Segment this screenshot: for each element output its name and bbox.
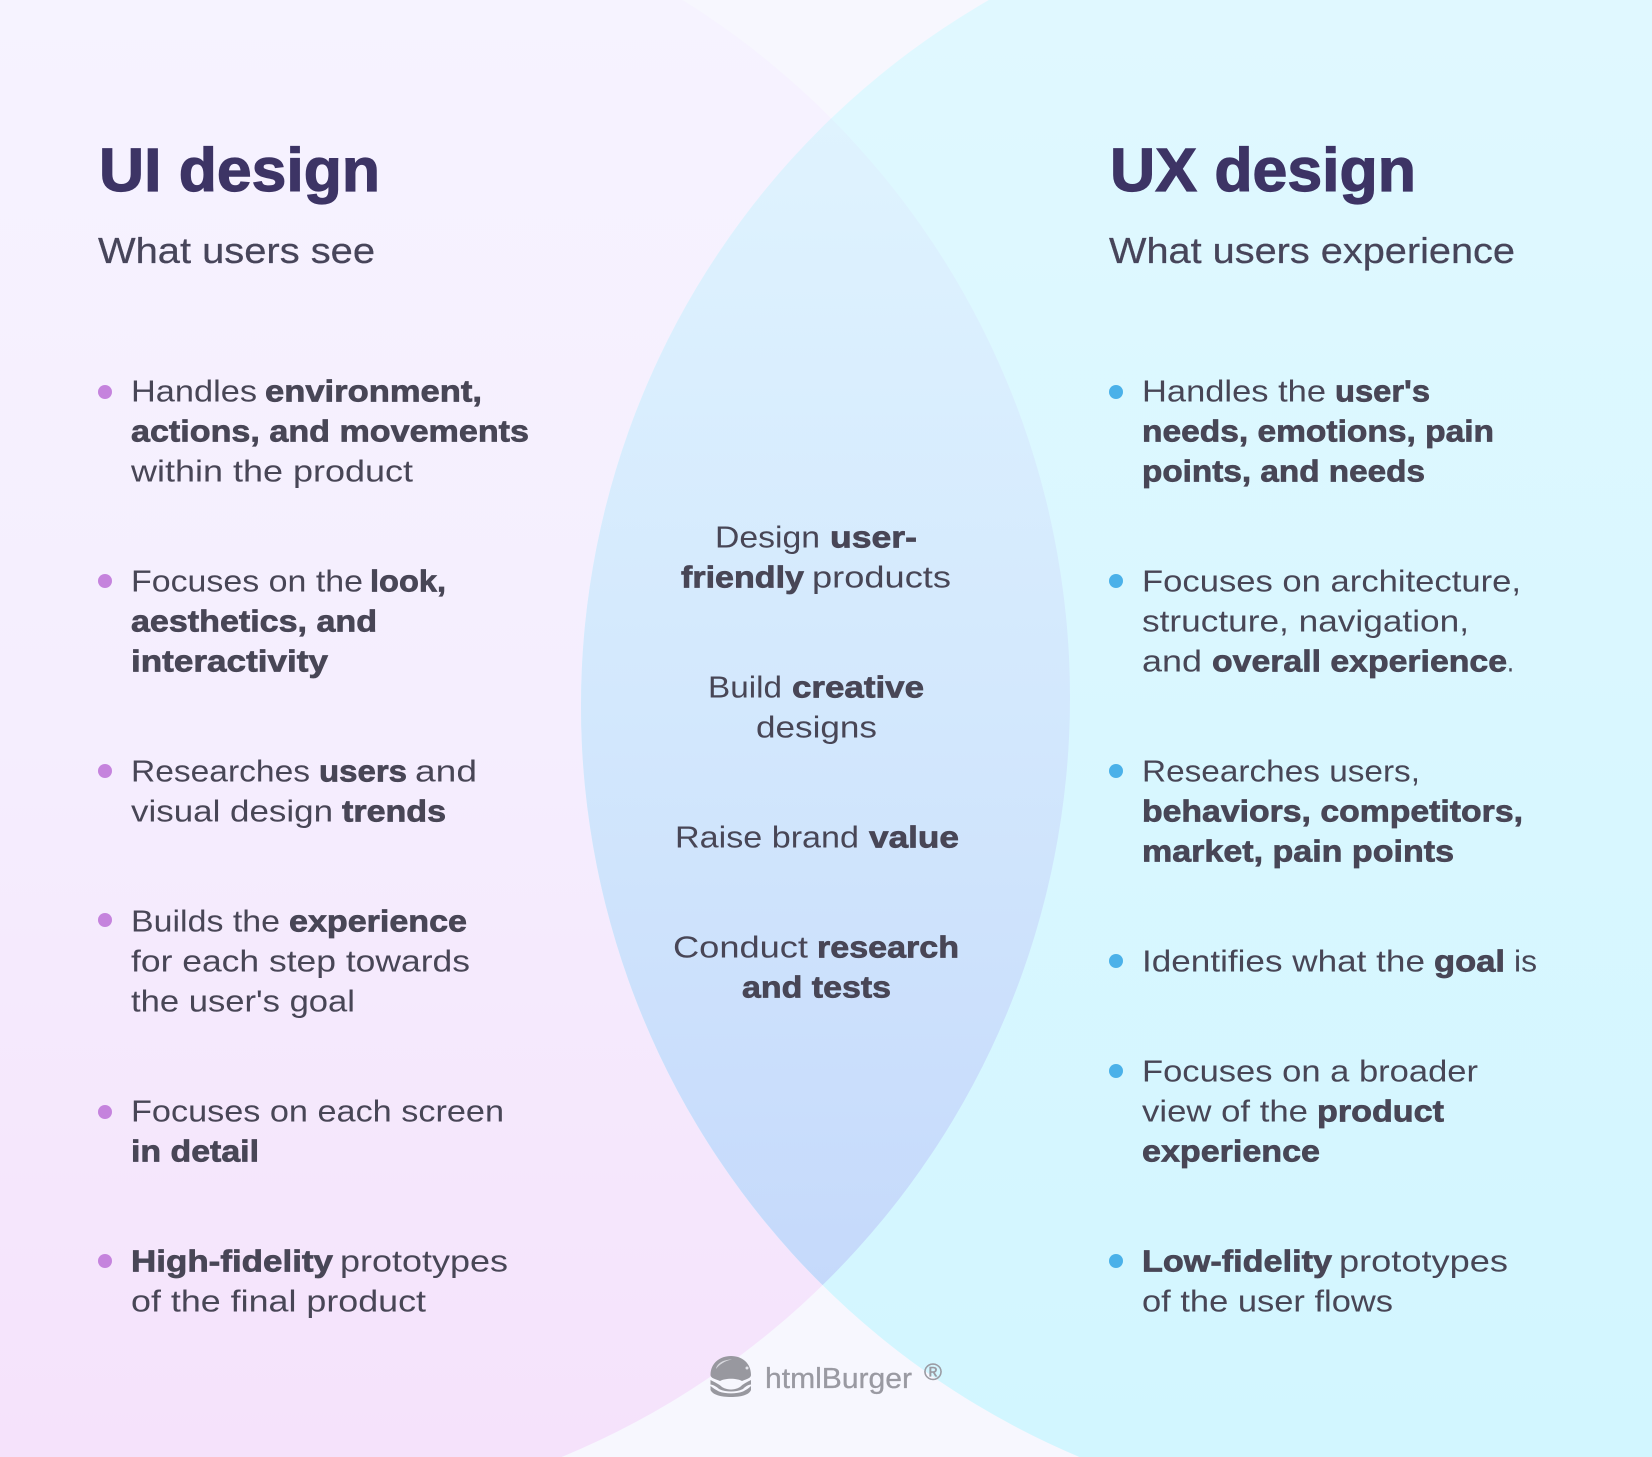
list item: goal: is: [1514, 944, 1537, 978]
icon: burger: [710, 1356, 751, 1397]
list item: architecture: .: [1507, 644, 1514, 678]
list item: product experience: product: [1317, 1094, 1444, 1128]
list item: user needs: [1109, 374, 1494, 488]
list item: environment: within the product: [130, 454, 414, 488]
heading: UI design: UI design: [99, 136, 380, 204]
circle: UX design: [581, 0, 1652, 1457]
list item: product experience: view of the: [1142, 1094, 1308, 1128]
list item: research behaviors: [1109, 754, 1523, 868]
list item: detail: [98, 1094, 504, 1168]
shared item: user-friendly: friendly: [681, 560, 804, 594]
list item: research trends: [98, 754, 477, 828]
list item: user needs: needs, emotions, pain: [1142, 414, 1494, 448]
list item: experience: experience: [289, 904, 467, 938]
list item: look: aesthetics, and: [131, 604, 377, 638]
list item: look: look,: [370, 564, 446, 598]
list item: product experience: [1109, 1054, 1478, 1168]
list item: user needs: user's: [1335, 374, 1430, 408]
list item: research trends: and: [415, 754, 477, 788]
list item: experience: the user's goal: [131, 984, 355, 1018]
list item: detail: Focuses on each screen: [131, 1094, 504, 1128]
list item: look: Focuses on the: [131, 564, 363, 598]
list item: research trends: visual design: [131, 794, 333, 828]
shared item: research and tests: and tests: [742, 970, 891, 1004]
list item: research trends: Researches: [131, 754, 310, 788]
subheading: What users see: What users see: [98, 230, 375, 271]
list item: architecture: overall experience: [1212, 644, 1507, 678]
list item: product experience: experience: [1142, 1134, 1320, 1168]
shared item: user-friendly: [681, 520, 951, 594]
lens: overlap of both circles: [581, 302, 1070, 1285]
list item: high-fidelity: High-fidelity: [131, 1244, 333, 1278]
list item: look: interactivity: [131, 644, 328, 678]
shared item: creative designs: [708, 670, 924, 744]
list item: high-fidelity: of the final product: [131, 1284, 427, 1318]
shared item: creative designs: Build: [708, 670, 782, 704]
shared item: brand value: value: [869, 820, 959, 854]
list item: research trends: users: [319, 754, 407, 788]
list item: architecture: structure, navigation,: [1142, 604, 1469, 638]
list item: architecture: Focuses on architecture,: [1142, 564, 1521, 598]
registered mark: ®: [924, 1359, 942, 1385]
logo: htmlBurger: [710, 1356, 942, 1397]
shared item: user-friendly: Design: [715, 520, 820, 554]
list item: experience: for each step towards: [131, 944, 470, 978]
circle: UI design: [0, 0, 1070, 1457]
shared item: research and tests: [673, 930, 959, 1004]
list item: high-fidelity: prototypes: [340, 1244, 508, 1278]
list item: product experience: Focuses on a broader: [1142, 1054, 1478, 1088]
list item: environment: environment,: [265, 374, 482, 408]
list item: research behaviors: Researches users,: [1142, 754, 1420, 788]
list item: goal: goal: [1434, 944, 1505, 978]
subheading: What users experience: What users experience: [1109, 230, 1515, 271]
list item: user needs: Handles the: [1142, 374, 1326, 408]
list item: environment: Handles: [131, 374, 257, 408]
list item: environment: [98, 374, 529, 488]
list item: low-fidelity: of the user flows: [1142, 1284, 1393, 1318]
shared item: user-friendly: products: [812, 560, 951, 594]
shared item: creative designs: designs: [756, 710, 877, 744]
list item: research trends: trends: [342, 794, 446, 828]
panel: shared traits: [673, 520, 959, 1004]
list item: goal: Identifies what the: [1142, 944, 1425, 978]
shared item: brand value: [675, 820, 959, 854]
list item: experience: Builds the: [131, 904, 280, 938]
list item: low-fidelity: [1109, 1244, 1508, 1318]
list item: look: [98, 564, 446, 678]
list item: experience: [98, 904, 470, 1018]
list item: detail: in detail: [131, 1134, 259, 1168]
list item: research behaviors: market, pain points: [1142, 834, 1454, 868]
panel: UX design list: [1109, 374, 1537, 1318]
wordmark: htmlBurger: [765, 1363, 912, 1395]
list item: goal: [1109, 944, 1537, 978]
list item: high-fidelity: [98, 1244, 508, 1318]
list item: low-fidelity: Low-fidelity: [1142, 1244, 1332, 1278]
shared item: creative designs: creative: [792, 670, 924, 704]
list item: architecture: and: [1142, 644, 1202, 678]
list item: environment: actions, and movements: [131, 414, 529, 448]
shared item: brand value: Raise brand: [675, 820, 859, 854]
shared item: research and tests: research: [817, 930, 959, 964]
list item: research behaviors: behaviors, competitors,: [1142, 794, 1523, 828]
heading: UX design: UX design: [1110, 136, 1416, 204]
list item: architecture: [1109, 564, 1521, 678]
shared item: user-friendly: user-: [830, 520, 917, 554]
list item: user needs: points, and needs: [1142, 454, 1425, 488]
list item: low-fidelity: prototypes: [1339, 1244, 1508, 1278]
shared item: research and tests: Conduct: [673, 930, 809, 964]
panel: UI design list: [98, 374, 529, 1318]
